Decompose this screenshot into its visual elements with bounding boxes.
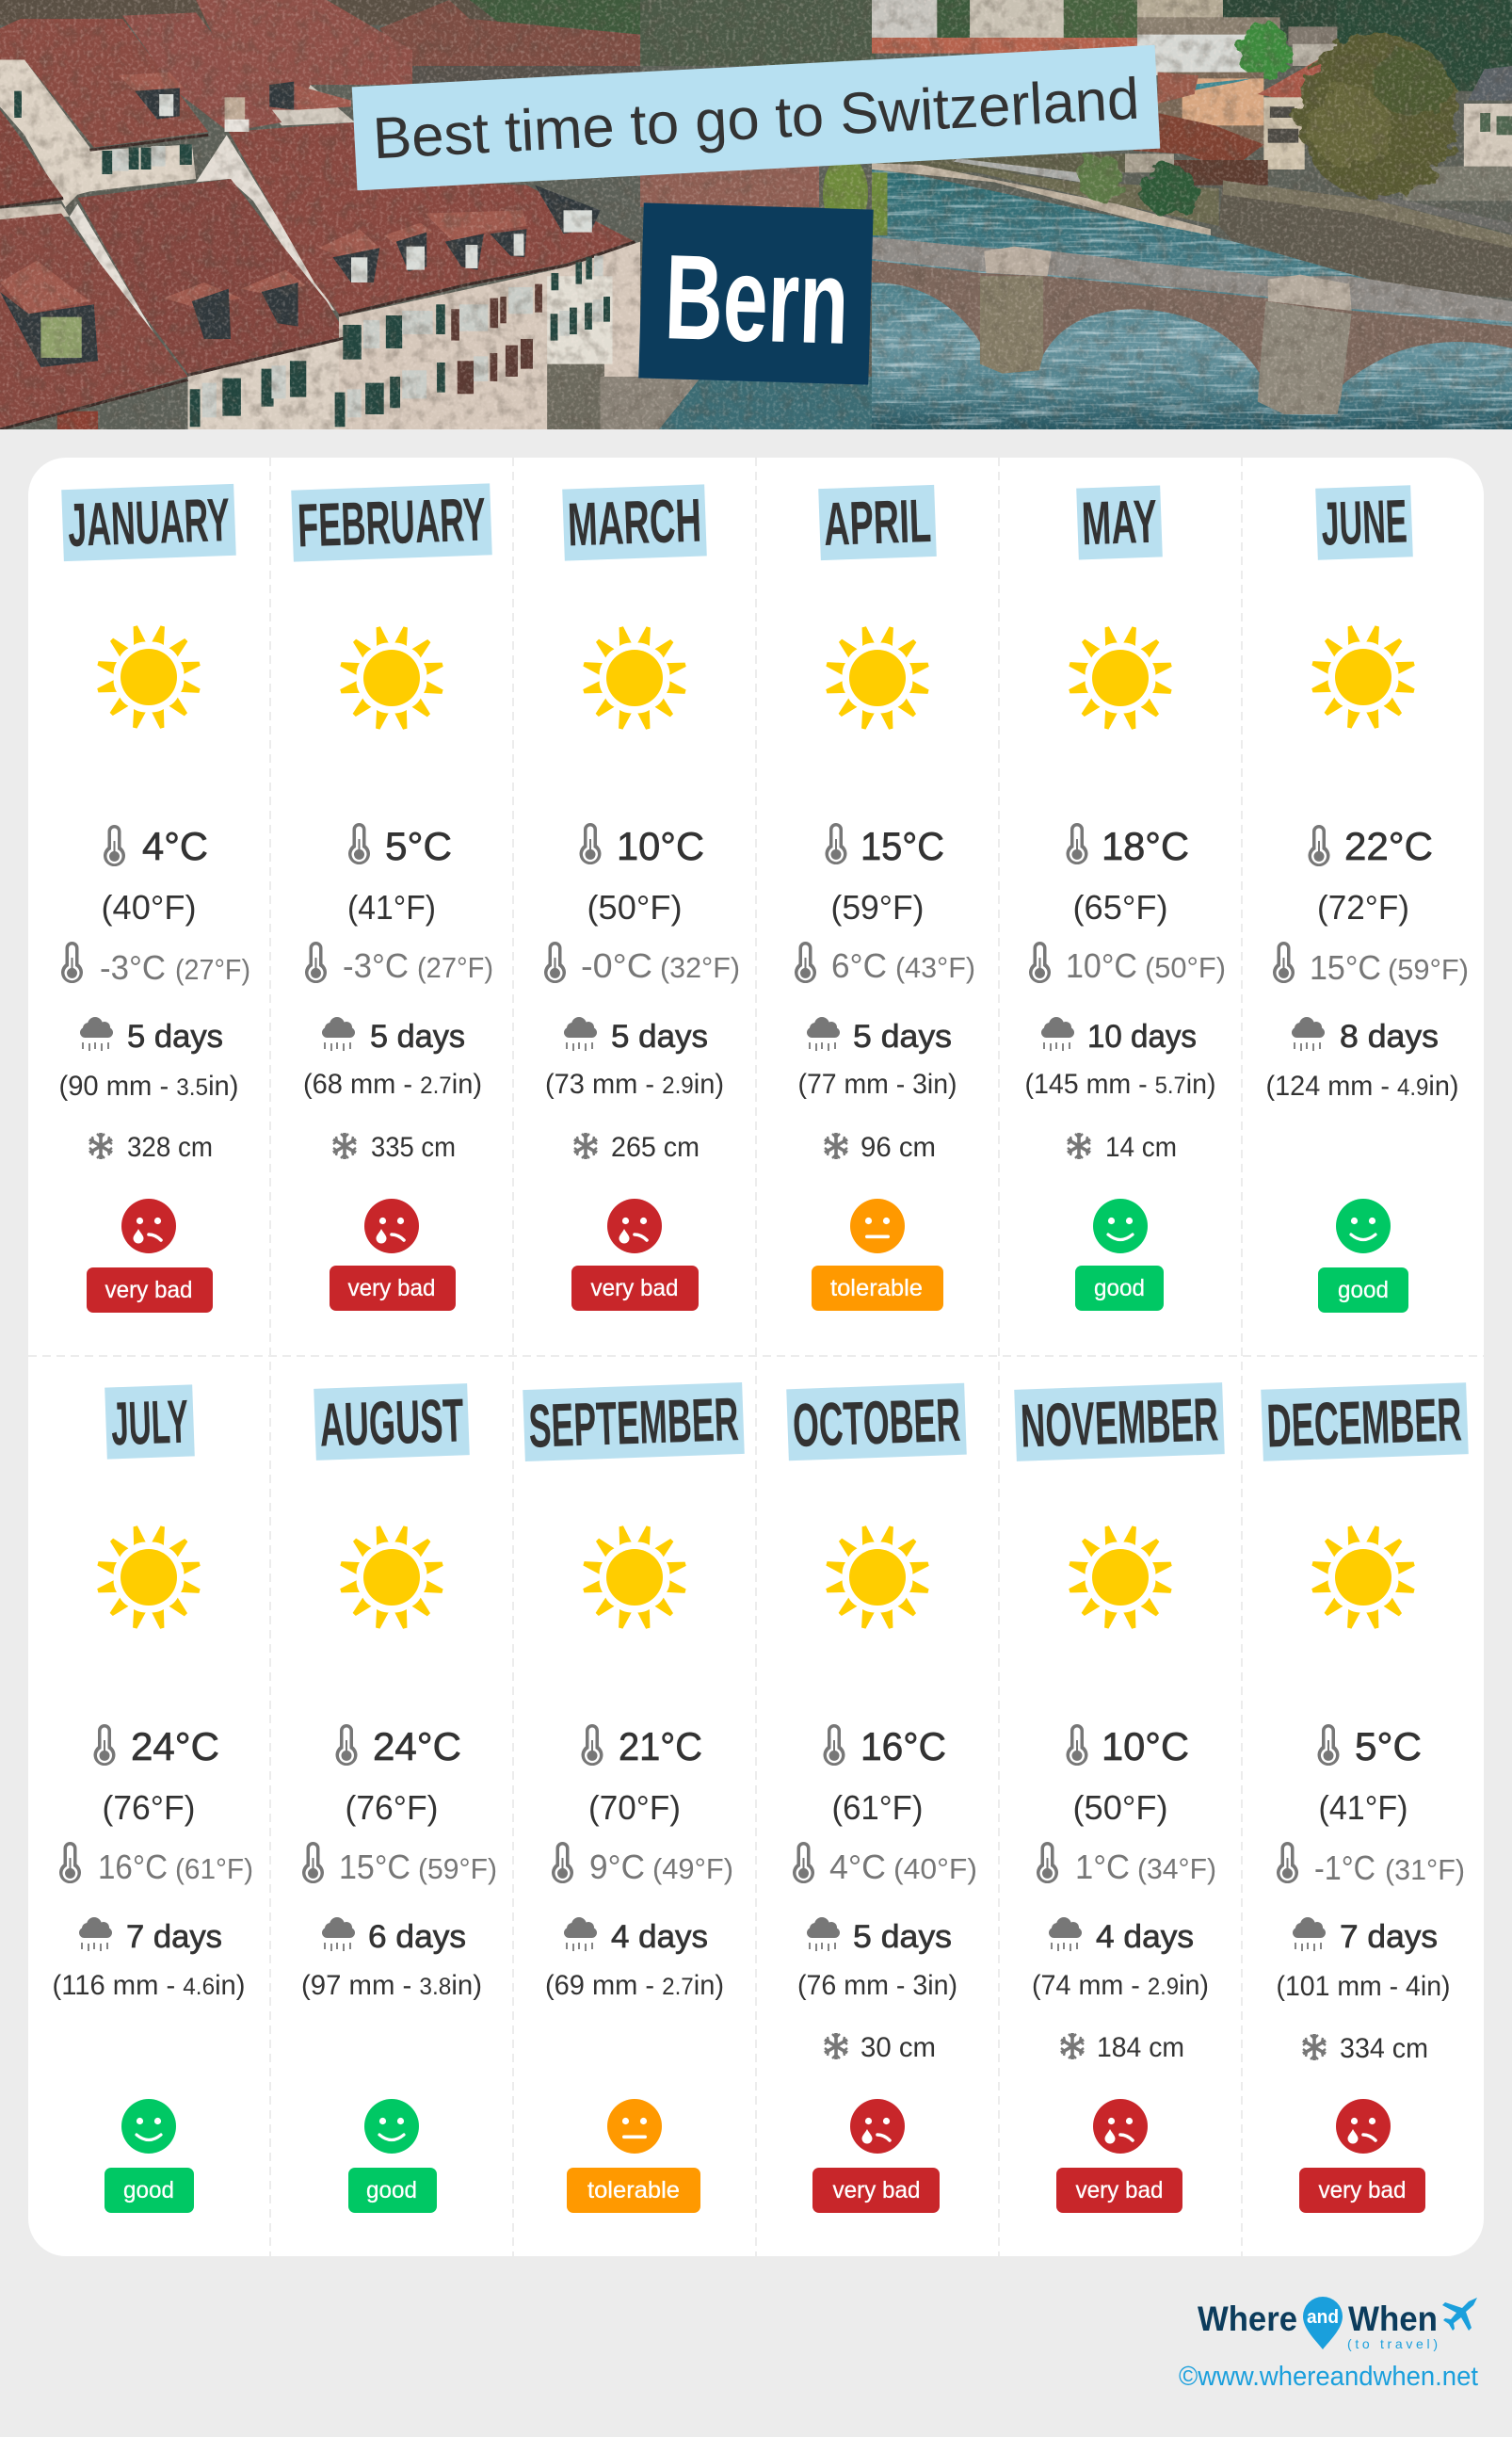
low temperature: 4°C bbox=[829, 1848, 886, 1886]
low temperature bbox=[1037, 1842, 1216, 1886]
rainfall bbox=[545, 1017, 724, 1100]
rainfall: (97 mm - 3.8in) bbox=[301, 1970, 482, 2001]
rating: very bad bbox=[330, 1199, 456, 1311]
month heading bbox=[291, 483, 492, 562]
high temperature: 5°C bbox=[1355, 1724, 1422, 1768]
month heading bbox=[61, 484, 236, 561]
header photo: Bern old town and river bbox=[0, 0, 1512, 429]
high temperature bbox=[1309, 824, 1433, 927]
month heading bbox=[314, 1383, 470, 1461]
logo: Where and When: Where bbox=[1198, 2300, 1297, 2338]
snowfall: 328 cm bbox=[127, 1132, 213, 1163]
rainfall: (76 mm - 3in) bbox=[797, 1970, 957, 2001]
low temperature bbox=[544, 942, 740, 985]
month heading: SEPTEMBER bbox=[527, 1384, 740, 1461]
rating: very bad: very bad bbox=[591, 1275, 678, 1301]
high temperature: 5°C bbox=[385, 824, 452, 868]
low temperature: -0°C bbox=[581, 946, 652, 985]
city name banner bbox=[638, 202, 874, 385]
month heading bbox=[523, 1382, 745, 1461]
icon: sun bbox=[1311, 1525, 1416, 1630]
high temperature bbox=[825, 823, 944, 927]
rainfall: 5 days bbox=[853, 1919, 952, 1955]
rainfall: 7 days bbox=[126, 1919, 222, 1955]
icon: map pin bbox=[1303, 2297, 1343, 2349]
rating: tolerable bbox=[812, 1199, 943, 1311]
icon: sun bbox=[1068, 1525, 1173, 1630]
snowfall bbox=[825, 1132, 936, 1163]
icon: sun bbox=[825, 625, 930, 731]
rating: very bad: very bad bbox=[105, 1277, 192, 1303]
panel: January bbox=[58, 484, 250, 1313]
rating: very bad: very bad bbox=[1318, 2177, 1407, 2203]
rainfall: 8 days bbox=[1340, 1019, 1439, 1055]
low temperature: (49°F) bbox=[652, 1852, 733, 1885]
city name banner: Bern bbox=[663, 230, 850, 370]
snowfall: 184 cm bbox=[1097, 2032, 1184, 2063]
snowfall: 335 cm bbox=[371, 1132, 456, 1163]
rainfall bbox=[53, 1917, 245, 2001]
rating: good: good bbox=[366, 2177, 417, 2203]
high temperature bbox=[347, 823, 452, 927]
rating: very bad bbox=[571, 1199, 699, 1311]
website credit: ©www.whereandwhen.net bbox=[1179, 2362, 1478, 2392]
high temperature: (65°F) bbox=[1073, 888, 1167, 927]
panel: September bbox=[523, 1382, 745, 2213]
high temperature bbox=[1066, 1724, 1189, 1827]
rating: very bad bbox=[1056, 2099, 1182, 2213]
low temperature: (40°F) bbox=[893, 1852, 977, 1885]
month heading: MAY bbox=[1081, 487, 1158, 557]
low temperature bbox=[1029, 942, 1226, 985]
month heading: FEBRUARY bbox=[297, 485, 487, 559]
rainfall: (90 mm - 3.5in) bbox=[58, 1071, 238, 1102]
low temperature: 9°C bbox=[589, 1848, 645, 1886]
snowfall bbox=[1061, 2032, 1184, 2063]
rainfall: 4 days bbox=[1096, 1919, 1194, 1955]
rainfall bbox=[1265, 1017, 1459, 1102]
icon: sun bbox=[1311, 624, 1416, 730]
rainfall: (68 mm - 2.7in) bbox=[303, 1069, 482, 1100]
rating: very bad bbox=[87, 1199, 213, 1313]
month heading bbox=[1076, 485, 1163, 560]
logo: Where and When: (to travel) bbox=[1347, 2336, 1438, 2351]
high temperature: 4°C bbox=[142, 824, 208, 868]
low temperature: (59°F) bbox=[1388, 953, 1469, 986]
low temperature: (31°F) bbox=[1385, 1853, 1465, 1886]
month heading bbox=[1315, 485, 1413, 560]
high temperature bbox=[102, 824, 208, 927]
low temperature bbox=[302, 1842, 497, 1886]
low temperature bbox=[1273, 942, 1469, 987]
rainfall: 5 days bbox=[127, 1019, 223, 1055]
logo: Where and When: When bbox=[1348, 2300, 1438, 2338]
month heading bbox=[105, 1384, 195, 1460]
panel: July bbox=[53, 1384, 253, 2213]
rating: very bad: very bad bbox=[1075, 2177, 1164, 2203]
rainfall: 5 days bbox=[611, 1019, 708, 1055]
high temperature: 24°C bbox=[373, 1724, 461, 1768]
high temperature: (72°F) bbox=[1317, 888, 1409, 927]
high temperature bbox=[1066, 823, 1189, 927]
icon: sun bbox=[1068, 625, 1173, 731]
title banner: Best time to go to Switzerland bbox=[371, 67, 1141, 171]
rainfall bbox=[1024, 1017, 1216, 1100]
high temperature: (76°F) bbox=[102, 1788, 196, 1827]
rating: very bad: very bad bbox=[832, 2177, 921, 2203]
rainfall bbox=[58, 1017, 238, 1102]
high temperature bbox=[1318, 1724, 1422, 1827]
month heading: NOVEMBER bbox=[1020, 1384, 1219, 1461]
low temperature: -3°C bbox=[100, 948, 166, 987]
rating: good bbox=[1318, 1199, 1408, 1313]
rainfall: 5 days bbox=[370, 1019, 465, 1055]
high temperature: 15°C bbox=[861, 824, 944, 868]
panel: October bbox=[786, 1383, 977, 2213]
low temperature: -1°C bbox=[1314, 1848, 1375, 1887]
high temperature: (50°F) bbox=[587, 888, 682, 927]
month heading bbox=[818, 485, 937, 560]
high temperature: (40°F) bbox=[102, 888, 196, 927]
high temperature: (61°F) bbox=[832, 1788, 923, 1827]
low temperature bbox=[59, 1842, 253, 1886]
snowfall: 96 cm bbox=[861, 1132, 936, 1163]
rainfall bbox=[1032, 1917, 1209, 2001]
snowfall: 30 cm bbox=[861, 2032, 936, 2063]
rainfall bbox=[303, 1017, 482, 1100]
high temperature bbox=[580, 823, 704, 927]
low temperature: (27°F) bbox=[175, 953, 250, 986]
icon: sun bbox=[96, 624, 201, 730]
low temperature: 10°C bbox=[1066, 946, 1137, 985]
logo: Where and When bbox=[1198, 2297, 1477, 2351]
panel: April bbox=[795, 485, 975, 1311]
panel: December bbox=[1261, 1382, 1469, 2213]
rating: tolerable: tolerable bbox=[830, 1275, 923, 1301]
high temperature: 21°C bbox=[619, 1724, 702, 1768]
panel: June bbox=[1265, 485, 1469, 1313]
low temperature: 6°C bbox=[831, 946, 887, 985]
rainfall bbox=[545, 1917, 724, 2001]
month heading: JUNE bbox=[1320, 486, 1408, 558]
high temperature: 10°C bbox=[1102, 1724, 1189, 1768]
high temperature bbox=[582, 1724, 702, 1827]
rainfall: 4 days bbox=[611, 1919, 708, 1955]
low temperature: 1°C bbox=[1075, 1848, 1130, 1886]
snowfall bbox=[89, 1132, 213, 1163]
snowfall bbox=[825, 2032, 936, 2063]
high temperature: 16°C bbox=[861, 1724, 946, 1768]
snowfall bbox=[574, 1132, 700, 1163]
low temperature: 16°C bbox=[98, 1848, 168, 1886]
month heading: JANUARY bbox=[67, 485, 231, 559]
rainfall: (73 mm - 2.9in) bbox=[545, 1069, 724, 1100]
month heading bbox=[562, 484, 707, 561]
rainfall: (77 mm - 3in) bbox=[798, 1069, 957, 1100]
rainfall: 5 days bbox=[853, 1019, 952, 1055]
low temperature: (32°F) bbox=[660, 951, 740, 984]
rainfall: (124 mm - 4.9in) bbox=[1265, 1071, 1459, 1102]
snowfall: 265 cm bbox=[611, 1132, 700, 1163]
month heading: JULY bbox=[110, 1387, 189, 1458]
high temperature: 24°C bbox=[131, 1724, 219, 1768]
rating: tolerable bbox=[567, 2099, 700, 2213]
rainfall bbox=[797, 1917, 957, 2001]
low temperature: (50°F) bbox=[1145, 951, 1226, 984]
low temperature: -3°C bbox=[343, 946, 409, 985]
title banner bbox=[352, 45, 1160, 190]
rating: good: good bbox=[123, 2177, 174, 2203]
rainfall: (101 mm - 4in) bbox=[1277, 1971, 1450, 2002]
rainfall: 6 days bbox=[368, 1919, 466, 1955]
high temperature bbox=[335, 1724, 461, 1827]
icon: map pin: and bbox=[1307, 2307, 1339, 2328]
rainfall: (69 mm - 2.7in) bbox=[545, 1970, 724, 2001]
high temperature: (59°F) bbox=[830, 888, 925, 927]
low temperature: 15°C bbox=[1310, 948, 1381, 987]
rating: tolerable: tolerable bbox=[587, 2177, 680, 2203]
panel: March bbox=[544, 484, 740, 1311]
icon: sun bbox=[339, 625, 444, 731]
month heading: OCTOBER bbox=[792, 1385, 961, 1460]
rating: very bad: very bad bbox=[348, 1275, 435, 1301]
rainfall bbox=[1277, 1917, 1450, 2002]
icon: airplane bbox=[1442, 2298, 1477, 2331]
high temperature: (70°F) bbox=[588, 1788, 681, 1827]
rating: good bbox=[105, 2099, 194, 2213]
month heading bbox=[1014, 1382, 1225, 1461]
rating: good: good bbox=[1338, 1277, 1389, 1303]
low temperature: (27°F) bbox=[417, 951, 493, 984]
rainfall: 7 days bbox=[1340, 1919, 1438, 1955]
panel: May bbox=[1024, 485, 1226, 1311]
snowfall bbox=[1303, 2033, 1428, 2064]
low temperature bbox=[552, 1842, 733, 1886]
low temperature bbox=[795, 942, 975, 985]
low temperature: (61°F) bbox=[175, 1852, 253, 1885]
rainfall: 10 days bbox=[1087, 1019, 1197, 1055]
high temperature: 22°C bbox=[1344, 824, 1433, 868]
low temperature: (59°F) bbox=[418, 1852, 497, 1885]
rainfall bbox=[301, 1917, 482, 2001]
panel: August bbox=[301, 1383, 497, 2213]
rainfall: (145 mm - 5.7in) bbox=[1024, 1069, 1216, 1100]
high temperature bbox=[94, 1724, 219, 1827]
high temperature bbox=[823, 1724, 946, 1827]
low temperature: 15°C bbox=[339, 1848, 410, 1886]
snowfall bbox=[333, 1132, 456, 1163]
month heading: AUGUST bbox=[318, 1385, 465, 1460]
rating: very bad bbox=[1299, 2099, 1425, 2213]
rating: very bad bbox=[812, 2099, 940, 2213]
high temperature: 18°C bbox=[1102, 824, 1189, 868]
month heading: APRIL bbox=[823, 486, 932, 558]
icon: sun bbox=[825, 1525, 930, 1630]
panel: November bbox=[1014, 1382, 1225, 2213]
icon: sun bbox=[339, 1525, 444, 1630]
high temperature: (41°F) bbox=[347, 888, 436, 927]
panel: February bbox=[291, 483, 493, 1311]
low temperature bbox=[61, 942, 250, 987]
panel: monthly calendar card bbox=[28, 458, 1484, 2256]
high temperature: 10°C bbox=[617, 824, 704, 868]
rainfall: (74 mm - 2.9in) bbox=[1032, 1970, 1209, 2001]
low temperature bbox=[305, 942, 493, 985]
high temperature: (41°F) bbox=[1318, 1788, 1408, 1827]
rating: good bbox=[1075, 1199, 1164, 1311]
high temperature: (76°F) bbox=[345, 1788, 439, 1827]
low temperature: (43°F) bbox=[895, 951, 975, 984]
month heading: MARCH bbox=[567, 486, 702, 558]
rainfall bbox=[798, 1017, 957, 1100]
low temperature bbox=[793, 1842, 977, 1886]
low temperature: (34°F) bbox=[1137, 1852, 1216, 1885]
snowfall bbox=[1068, 1132, 1177, 1163]
icon: sun bbox=[96, 1525, 201, 1630]
low temperature bbox=[1277, 1842, 1465, 1887]
month heading bbox=[786, 1383, 967, 1461]
rating: good: good bbox=[1094, 1275, 1145, 1301]
rainfall: (116 mm - 4.6in) bbox=[53, 1970, 245, 2001]
snowfall: 14 cm bbox=[1105, 1132, 1177, 1163]
high temperature: (50°F) bbox=[1073, 1788, 1167, 1827]
snowfall: 334 cm bbox=[1340, 2033, 1428, 2064]
icon: sun bbox=[582, 625, 687, 731]
rating: good bbox=[348, 2099, 437, 2213]
icon: sun bbox=[582, 1525, 687, 1630]
